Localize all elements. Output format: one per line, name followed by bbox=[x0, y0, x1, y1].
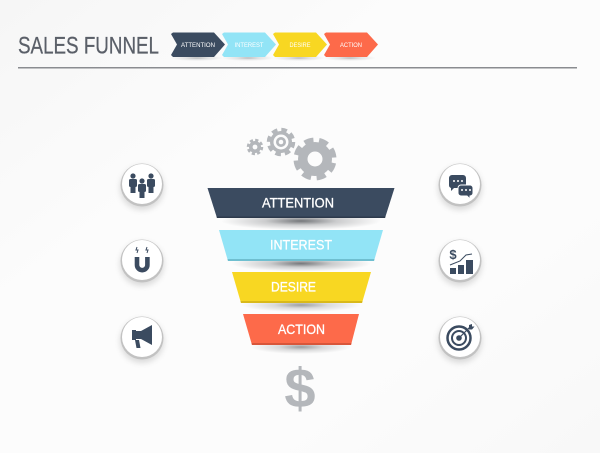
button: megaphone bbox=[120, 316, 164, 363]
button: chat bbox=[438, 164, 482, 210]
right icon buttons bbox=[438, 164, 482, 363]
icon: dollar sign: $ bbox=[284, 356, 316, 420]
funnel tier: attention bbox=[208, 188, 394, 218]
funnel tier: attention: ATTENTION bbox=[262, 196, 334, 210]
chevron: desire bbox=[273, 32, 327, 57]
icon: gears bbox=[248, 130, 337, 181]
title: SALES FUNNEL bbox=[18, 32, 159, 60]
chevron: interest: INTEREST bbox=[234, 42, 264, 49]
button: growth chart bbox=[438, 240, 482, 286]
button: growth chart: $ bbox=[449, 247, 457, 262]
funnel tier: interest: INTEREST bbox=[270, 238, 332, 252]
funnel tier: action bbox=[243, 314, 359, 345]
funnel bbox=[208, 188, 394, 354]
chevron: attention: ATTENTION bbox=[181, 42, 215, 49]
process chevrons bbox=[171, 32, 378, 61]
funnel tier: desire: DESIRE bbox=[271, 280, 316, 294]
funnel tier: action: ACTION bbox=[278, 322, 325, 337]
chevron: attention bbox=[171, 32, 225, 57]
chevron: interest bbox=[222, 32, 276, 57]
chevron: action bbox=[324, 32, 378, 57]
button: people bbox=[120, 164, 164, 210]
funnel tier: interest bbox=[219, 230, 383, 261]
funnel shadows bbox=[221, 212, 381, 354]
chevron: desire: DESIRE bbox=[290, 42, 311, 49]
button: target bbox=[438, 316, 482, 363]
funnel tier: desire bbox=[232, 272, 371, 303]
chevron: action: ACTION bbox=[340, 42, 362, 49]
button: magnet bbox=[120, 240, 164, 286]
left icon buttons bbox=[120, 164, 164, 363]
